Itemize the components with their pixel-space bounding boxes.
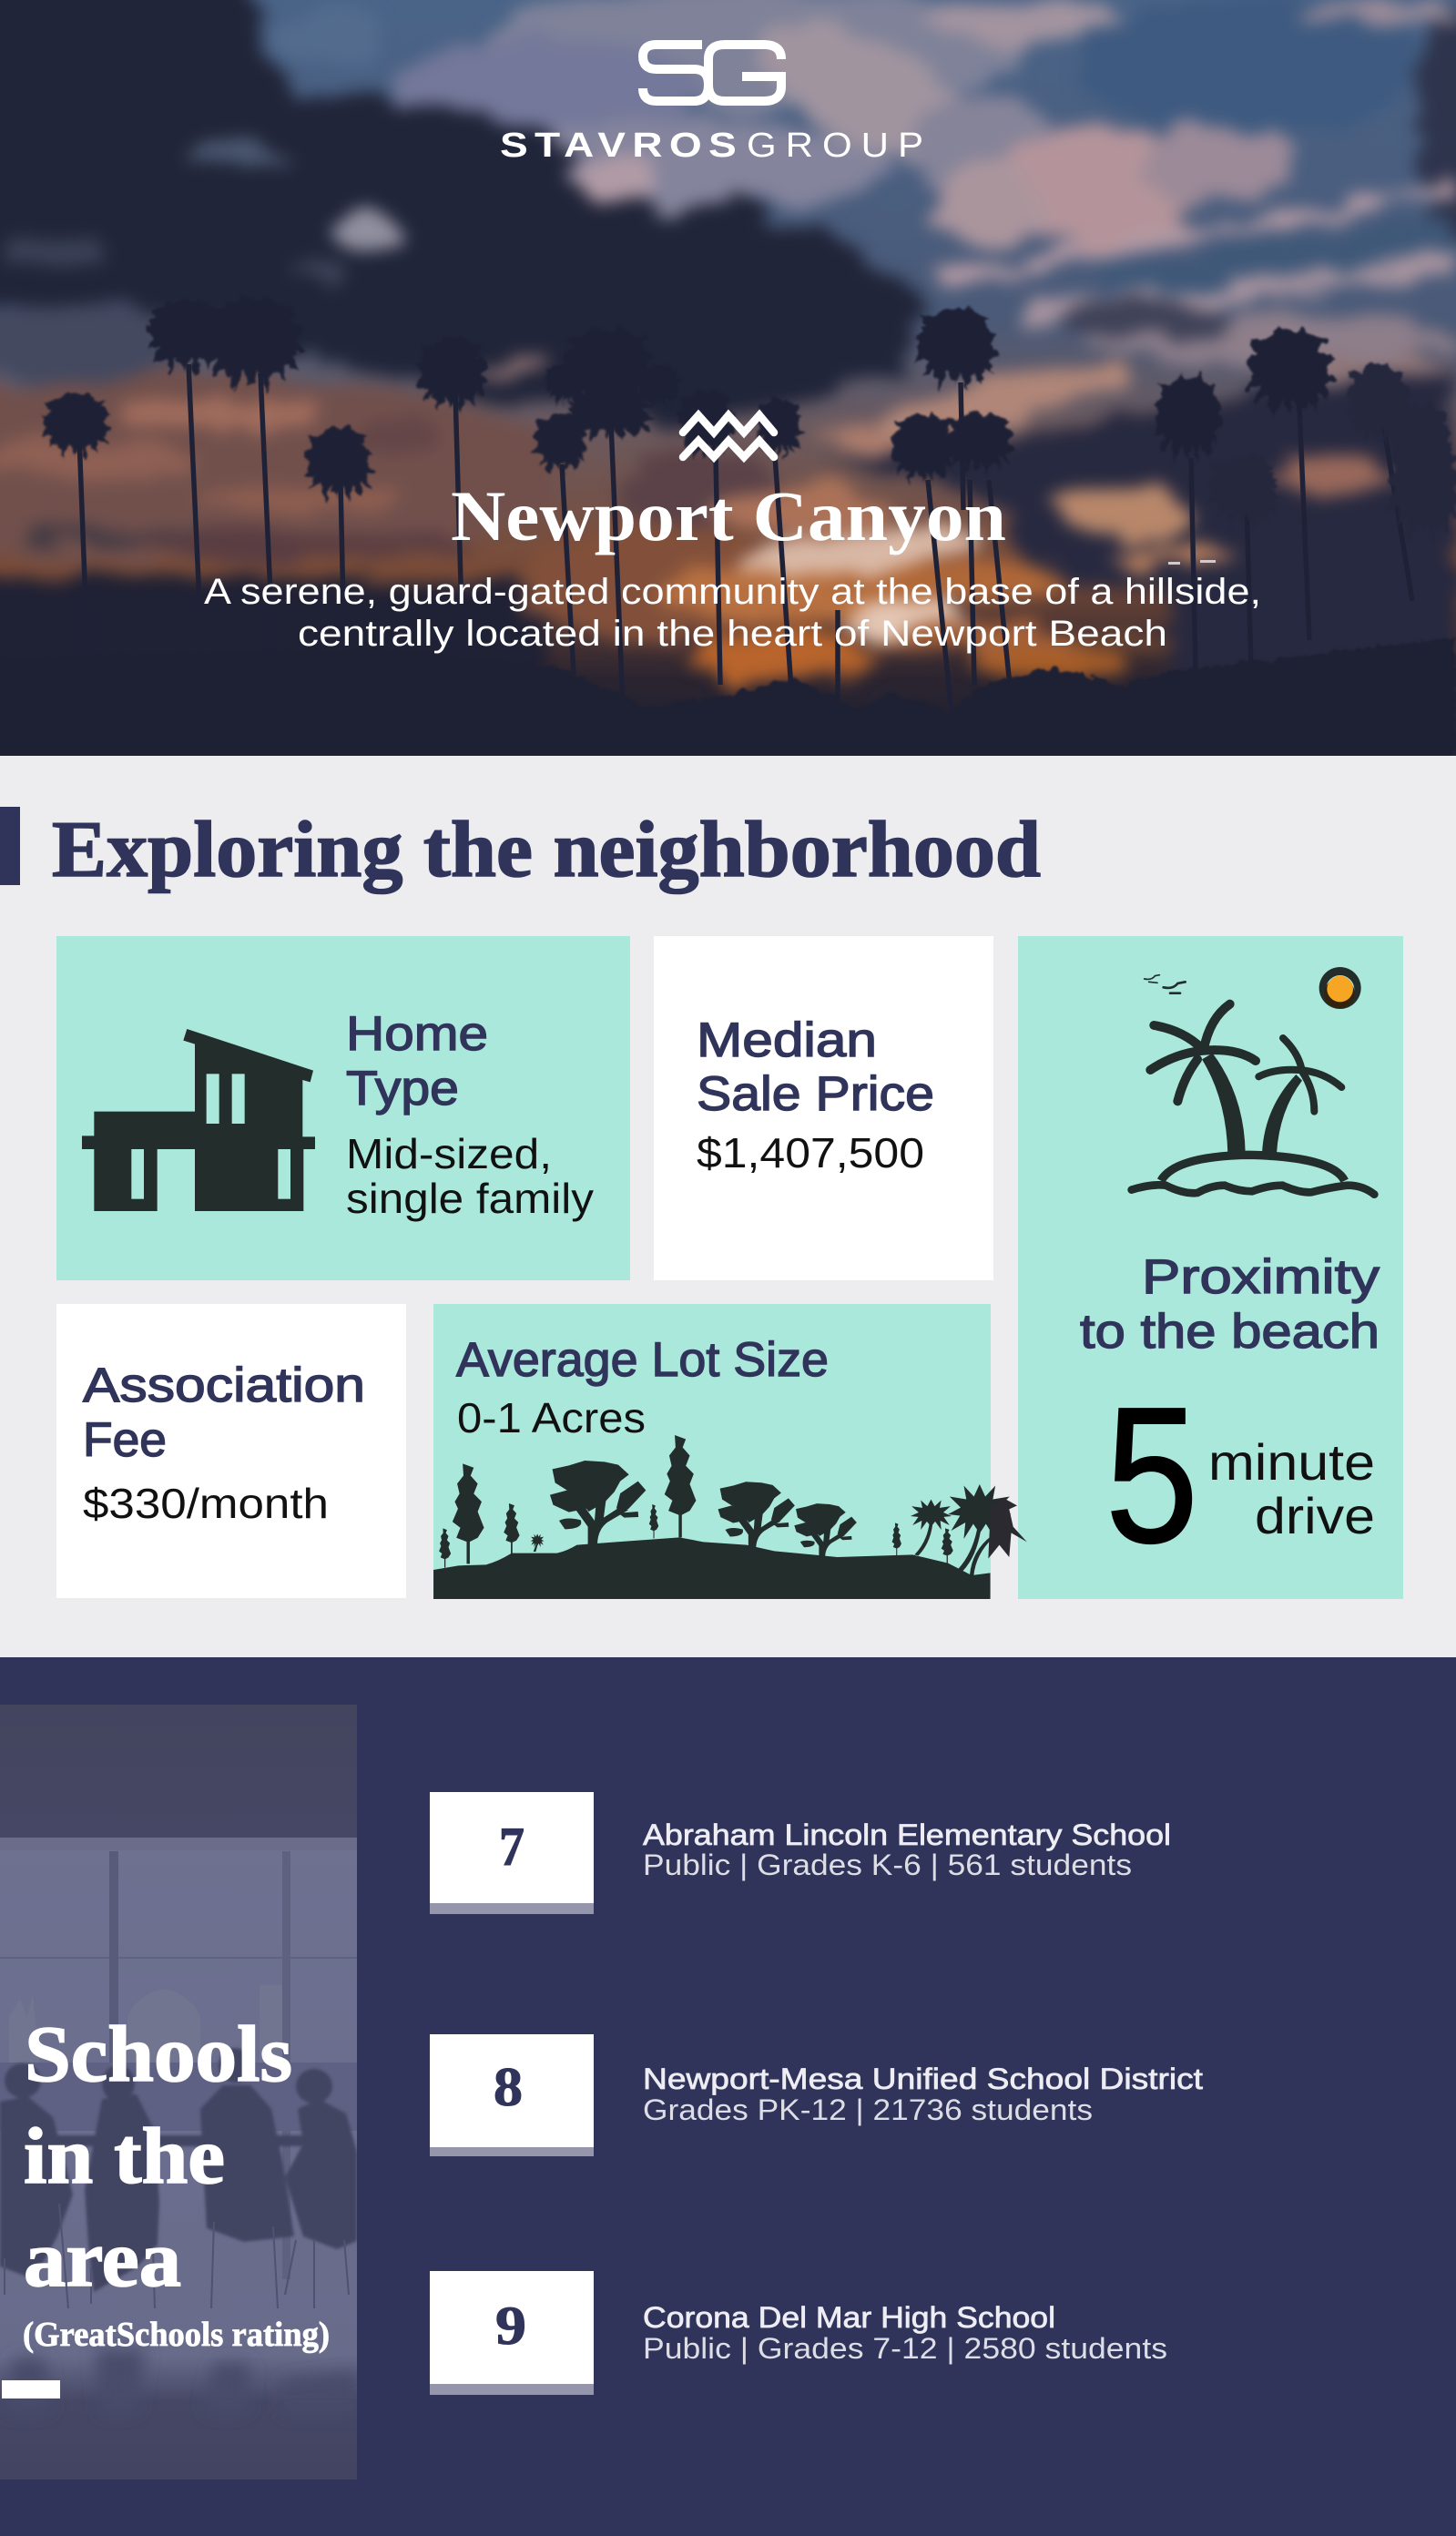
heading: schools in the area: in the: [24, 2113, 225, 2201]
dark diagonal band: [836, 363, 1456, 670]
school 2: [430, 2034, 1203, 2156]
proximity text: [1080, 1250, 1380, 1583]
card: median sale price: [654, 936, 993, 1280]
panel: meeting photo: [0, 1705, 357, 2480]
subtitle: [204, 572, 1261, 654]
card: median sale price: Sale Price: [697, 1067, 934, 1121]
card: average lot size: 0-1 Acres: [457, 1394, 646, 1441]
card: average lot size: Average Lot Size: [456, 1333, 829, 1387]
dark cloud mass: [0, 0, 924, 428]
rating card 7: 7: [499, 1817, 524, 1877]
home type text: single family: [346, 1175, 594, 1222]
home type text: [346, 1007, 594, 1222]
school 2 text: Newport-Mesa Unified School District: [643, 2062, 1203, 2095]
subtitle: A serene, guard-gated community at the base of a hillside,: [204, 572, 1261, 612]
school 1: [430, 1792, 1171, 1914]
card: home type: [56, 936, 630, 1280]
rating card 8: 8: [494, 2057, 523, 2117]
logo: Stavros Group: [500, 45, 932, 165]
title: Newport Canyon: [451, 476, 1006, 555]
card: association fee: Fee: [83, 1413, 167, 1467]
school 3 text: Corona Del Mar High School: [643, 2301, 1055, 2334]
card: median sale price: $1,407,500: [697, 1129, 924, 1176]
home type text: Mid-sized,: [346, 1130, 552, 1177]
panel: schools in the area: [0, 1657, 1456, 2536]
lit middle: [519, 528, 792, 637]
proximity text: 5: [1105, 1367, 1198, 1583]
card: median sale price: Median: [697, 1013, 877, 1067]
card: proximity to the beach: [1018, 936, 1403, 1599]
icon: house: [82, 1029, 315, 1211]
accent bar: [2, 2380, 60, 2399]
school 1 text: [643, 1818, 1171, 1881]
orange lower left: [0, 373, 565, 565]
card: average lot size: [433, 1304, 1027, 1599]
rating card 9: [430, 2271, 594, 2395]
heading: schools in the area: area: [24, 2215, 181, 2304]
school 3 text: [643, 2301, 1167, 2365]
school 2 text: Grades PK-12 | 21736 students: [643, 2093, 1093, 2126]
rating card 7: [430, 1792, 594, 1914]
heading: Exploring the neighborhood: [52, 806, 1041, 894]
school 3 text: Public | Grades 7-12 | 2580 students: [643, 2332, 1167, 2365]
illustration: tree-lined hill: [433, 1435, 1027, 1599]
panel: exploring the neighborhood: [0, 756, 1456, 1657]
proximity text: minute: [1208, 1433, 1375, 1491]
proximity text: Proximity: [1142, 1250, 1380, 1304]
palm tree silhouettes: [0, 297, 1456, 765]
proximity text: to the beach: [1080, 1305, 1380, 1359]
heading: schools in the area: Schools: [25, 2011, 292, 2099]
rating card 8: [430, 2034, 594, 2156]
icon: waves: [683, 415, 774, 457]
school 1 text: Abraham Lincoln Elementary School: [643, 1818, 1171, 1851]
accent bar: [0, 807, 20, 885]
card: association fee: $330/month: [83, 1480, 329, 1527]
heading: schools in the area: (GreatSchools rating): [23, 2316, 330, 2354]
icon: SG monogram: [643, 45, 781, 101]
card: association fee: [56, 1304, 406, 1598]
proximity text: drive: [1255, 1487, 1375, 1544]
people silhouettes: [0, 2048, 357, 2292]
subtitle: centrally located in the heart of Newport Beach: [298, 614, 1167, 654]
rating card 9: 9: [495, 2296, 526, 2356]
skyline: [9, 1985, 282, 2067]
home type text: Home: [346, 1007, 488, 1061]
school 2 text: [643, 2062, 1203, 2126]
school 3: [430, 2271, 1167, 2395]
card: association fee: Association: [83, 1359, 365, 1412]
logo wordmark: STAVROS: [500, 127, 743, 165]
logo wordmark second part: GROUP: [747, 127, 932, 165]
heading: schools in the area: [23, 2011, 330, 2354]
school 1 text: Public | Grades K-6 | 561 students: [643, 1849, 1132, 1881]
panel: hero sunset photo: [0, 0, 1456, 820]
home type text: Type: [346, 1062, 459, 1115]
icon: palm island: [1132, 967, 1374, 1195]
